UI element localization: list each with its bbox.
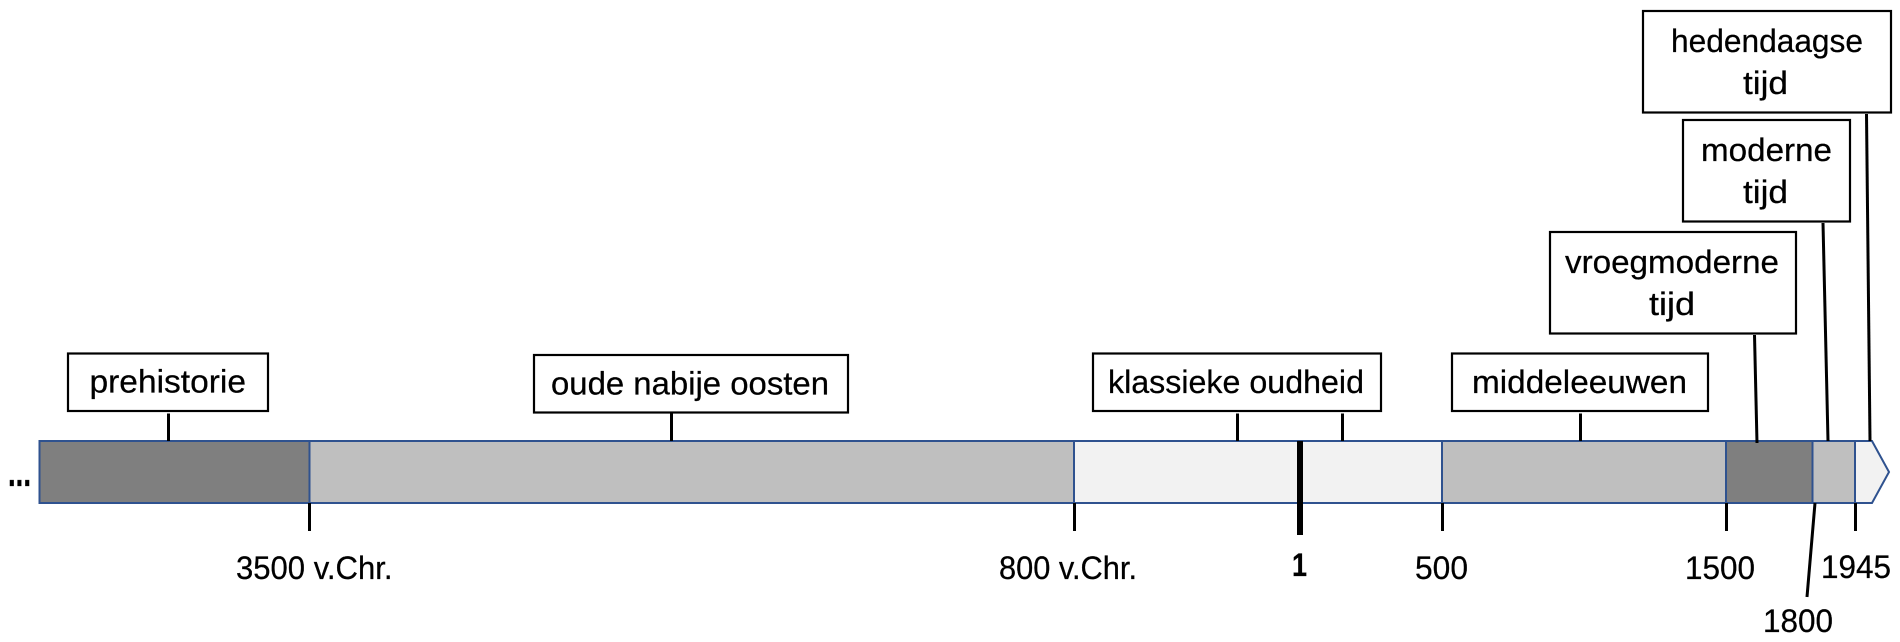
period label: klassieke oudheid: klassieke oudheid xyxy=(1108,364,1364,400)
period label: hedendaagse tijd: tijd xyxy=(1743,65,1788,101)
segment: middeleeuwen xyxy=(1442,441,1726,503)
date: 1800 xyxy=(1763,503,1833,639)
period label: klassieke oudheid xyxy=(1093,354,1381,441)
date: 500 xyxy=(1415,503,1468,586)
period label: hedendaagse tijd: hedendaagse xyxy=(1671,23,1863,59)
date: 800 v.Chr. xyxy=(999,503,1137,586)
period label: prehistorie xyxy=(68,354,268,441)
date: 3500 v.Chr.: 3500 v.Chr. xyxy=(236,550,392,586)
period label: hedendaagse tijd xyxy=(1643,11,1891,441)
period label: oude nabije oosten: oude nabije oosten xyxy=(551,366,829,402)
segment: moderne tijd xyxy=(1812,441,1855,503)
period label: middeleeuwen xyxy=(1452,354,1708,441)
period label: oude nabije oosten xyxy=(534,355,848,441)
segment: prehistorie xyxy=(40,441,310,503)
segment: oude nabije oosten xyxy=(310,441,1074,503)
ellipsis before timeline: ... xyxy=(8,451,31,495)
period label: moderne tijd: moderne xyxy=(1701,132,1832,168)
date: 1945 xyxy=(1821,503,1891,585)
period label: middeleeuwen: middeleeuwen xyxy=(1472,364,1687,400)
period label: vroegmoderne tijd: vroegmoderne xyxy=(1565,244,1779,280)
segment: klassieke oudheid xyxy=(1074,441,1442,503)
date: 1500: 1500 xyxy=(1685,550,1755,586)
period label: moderne tijd: tijd xyxy=(1743,174,1788,210)
date: 1500 xyxy=(1685,503,1755,586)
date: 1800: 1800 xyxy=(1763,603,1833,639)
period label: prehistorie: prehistorie xyxy=(90,364,246,400)
date: year 1: 1 xyxy=(1292,547,1307,583)
period label: moderne tijd xyxy=(1683,120,1850,441)
period label: vroegmoderne tijd xyxy=(1550,232,1796,443)
date: 500: 500 xyxy=(1415,550,1468,586)
segment: vroegmoderne tijd xyxy=(1726,441,1812,503)
date: 1945: 1945 xyxy=(1821,549,1891,585)
timeline bar xyxy=(40,441,1889,503)
segment: hedendaagse tijd arrow head xyxy=(1855,441,1889,503)
period label: vroegmoderne tijd: tijd xyxy=(1649,286,1695,322)
date: 800 v.Chr.: 800 v.Chr. xyxy=(999,550,1137,586)
